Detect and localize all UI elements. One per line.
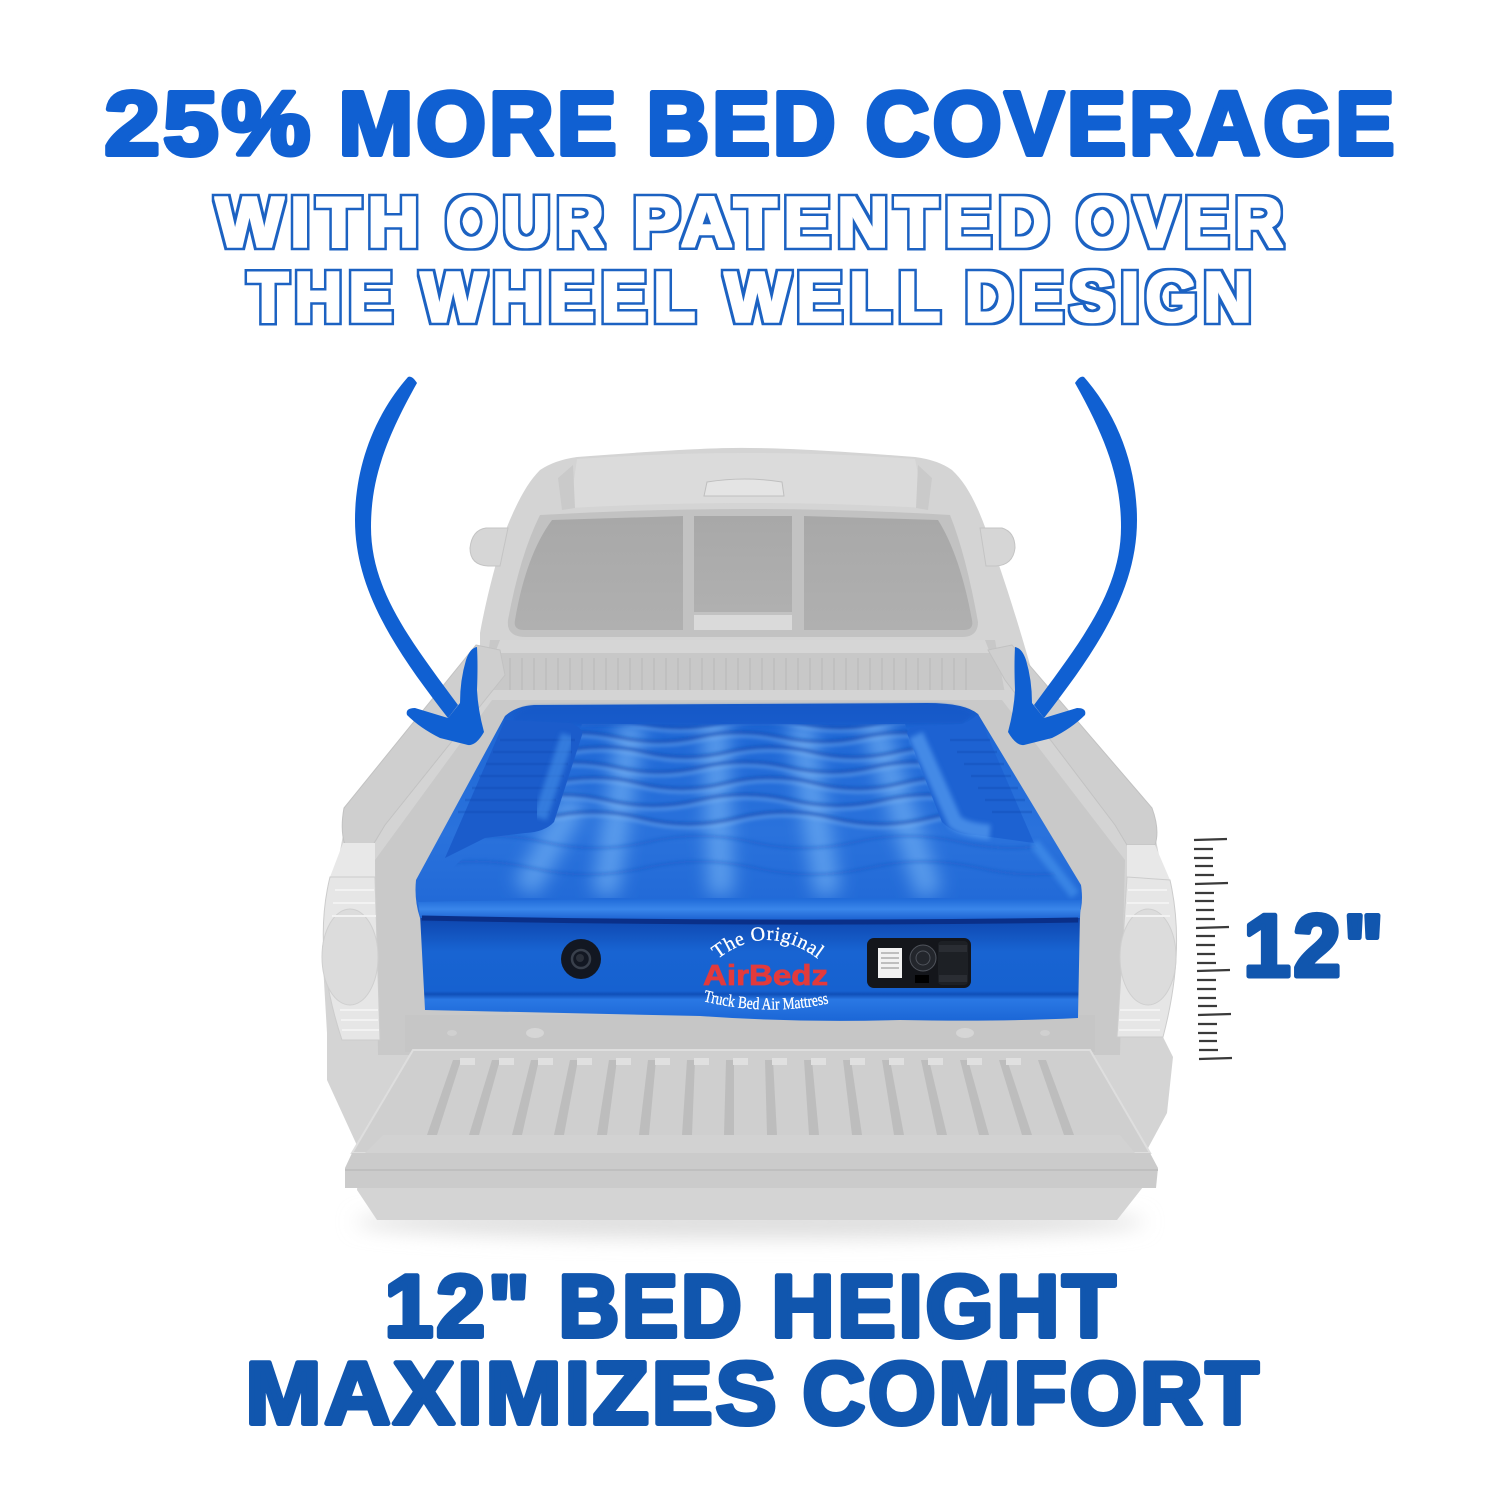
cab roof <box>478 448 1040 700</box>
mattress seam <box>422 918 1078 922</box>
tailgate <box>352 1050 1150 1153</box>
bed front wall <box>480 640 1010 720</box>
subtitle: outlined text: THE <box>248 258 399 336</box>
bed sill with bolts <box>405 1015 1095 1052</box>
subtitle: outlined text: WITH <box>216 183 426 261</box>
valve <box>561 939 601 979</box>
tailgate lip <box>345 1153 1158 1188</box>
logo: Truck Bed Air Mattress: Truck Bed Air Mattress <box>704 990 828 1010</box>
title: 25% <box>104 74 314 174</box>
pump panel <box>867 938 971 988</box>
left window pane <box>515 516 683 630</box>
right bed rail <box>988 645 1157 845</box>
left tail light <box>322 843 380 1040</box>
right mirror <box>980 528 1015 566</box>
title: COVERAGE <box>866 74 1398 174</box>
quilted pattern <box>501 724 1027 898</box>
subtitle: outlined text: WELL <box>725 258 947 336</box>
left mirror <box>470 528 508 566</box>
roof pillars <box>558 465 932 510</box>
height label: 12" <box>1244 896 1386 995</box>
arrow: right curved <box>1008 377 1137 745</box>
title: BED <box>646 74 838 174</box>
rear window frame <box>508 509 978 637</box>
bottom heading <box>246 1256 1262 1442</box>
height ruler <box>1194 839 1232 1059</box>
bottom heading: BED <box>558 1256 744 1356</box>
subtitle: outlined text: PATENTED <box>633 183 1056 261</box>
tailgate plates <box>460 1058 1021 1065</box>
subtitle: outlined text: OUR <box>446 183 610 261</box>
middle window pane <box>694 516 792 612</box>
brake light <box>704 479 784 496</box>
bed interior <box>375 700 1125 1055</box>
subtitle: outlined text <box>216 183 1289 336</box>
logo: The Original: The Original <box>710 927 824 959</box>
tailgate ribs <box>427 1060 1074 1135</box>
bottom heading: 12" <box>384 1256 532 1356</box>
logo: AirBedz: AirBedz <box>703 960 828 992</box>
right tail light <box>1117 845 1177 1037</box>
mattress front side <box>420 914 1080 1021</box>
left bed rail <box>342 645 505 845</box>
truck illustration in gray <box>322 448 1177 1238</box>
subtitle: outlined text: WHEEL <box>421 258 702 336</box>
tailgate lower plate <box>365 1135 1135 1153</box>
front top lip <box>418 898 1081 920</box>
subtitle: outlined text: OVER <box>1077 183 1289 261</box>
title <box>104 74 1398 174</box>
truck body <box>322 690 1177 1220</box>
middle sill <box>694 615 792 630</box>
title: MORE <box>338 74 620 174</box>
bottom heading: HEIGHT <box>772 1256 1118 1356</box>
bottom heading: MAXIMIZES <box>246 1344 780 1442</box>
left wheel well extension <box>445 720 582 858</box>
right window pane <box>804 516 972 630</box>
top border band <box>512 704 974 726</box>
bottom heading: COMFORT <box>802 1344 1262 1442</box>
arrow: left curved <box>355 377 484 745</box>
mattress top surface <box>416 703 1082 918</box>
air mattress <box>416 702 1082 1021</box>
subtitle: outlined text: DESIGN <box>965 258 1258 336</box>
ground shadow <box>355 1206 1145 1238</box>
right wheel well extension <box>907 714 1075 895</box>
